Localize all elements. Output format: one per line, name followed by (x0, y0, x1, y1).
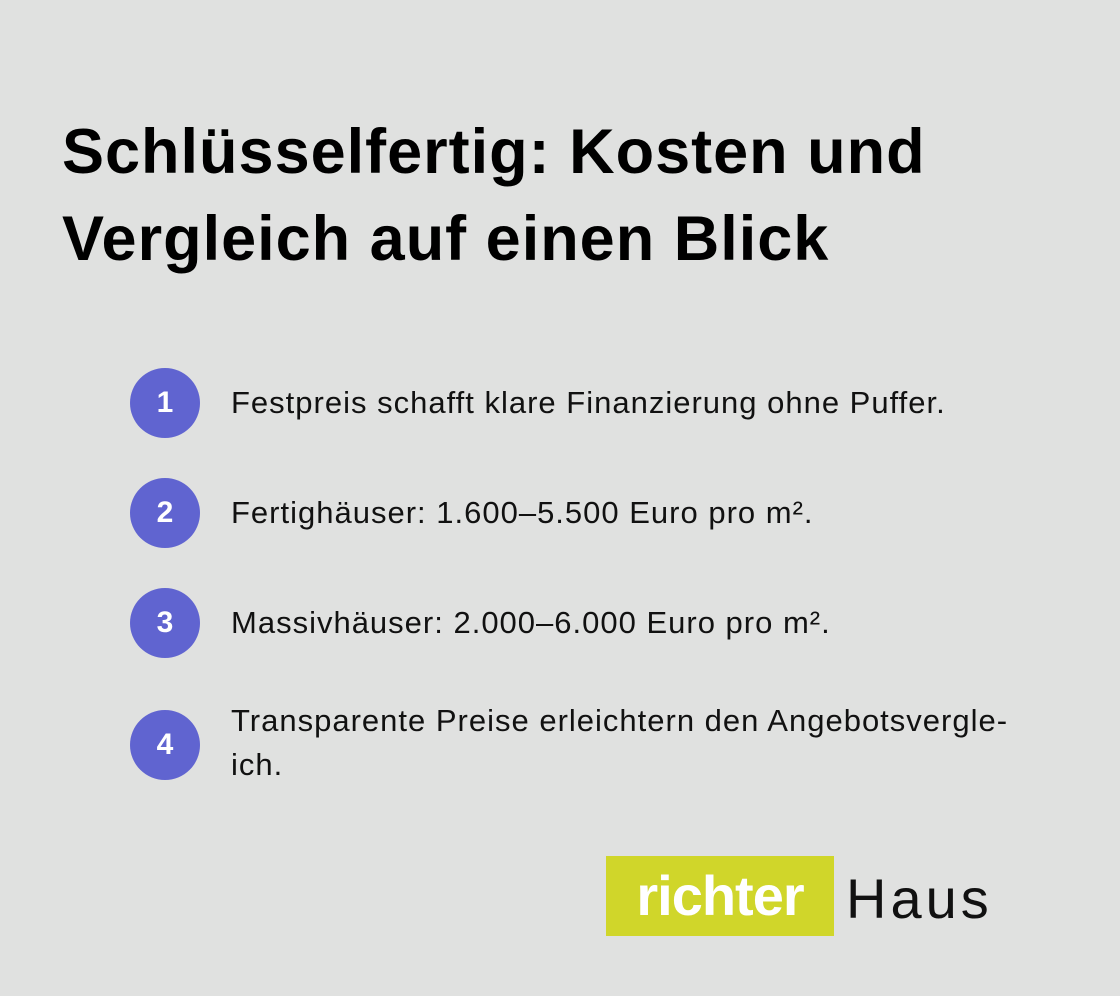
item 1: 1 (157, 386, 173, 419)
logo: richter (636, 864, 804, 927)
item 2: Fertighäuser: 1.600–5.500 Euro pro m². (231, 495, 814, 530)
item 2 (130, 478, 814, 548)
title: Vergleich auf einen Blick (62, 204, 829, 274)
item 3: Massivhäuser: 2.000–6.000 Euro pro m². (231, 605, 831, 640)
logo (606, 856, 993, 936)
item 4 (130, 703, 1008, 782)
title: Schlüsselfertig: Kosten und (62, 117, 926, 187)
item 1: Festpreis schafft klare Finanzierung ohne Puffer. (231, 385, 946, 420)
item 3: 3 (157, 606, 173, 639)
item 4: Transparente Preise erleichtern den Angebotsvergle- (231, 703, 1008, 738)
item 4: 4 (157, 728, 173, 761)
logo: Haus (846, 867, 993, 930)
item 3 (130, 588, 831, 658)
title (62, 117, 926, 274)
item 2: 2 (157, 496, 173, 529)
item 1 (130, 368, 946, 438)
item 4: ich. (231, 747, 283, 782)
